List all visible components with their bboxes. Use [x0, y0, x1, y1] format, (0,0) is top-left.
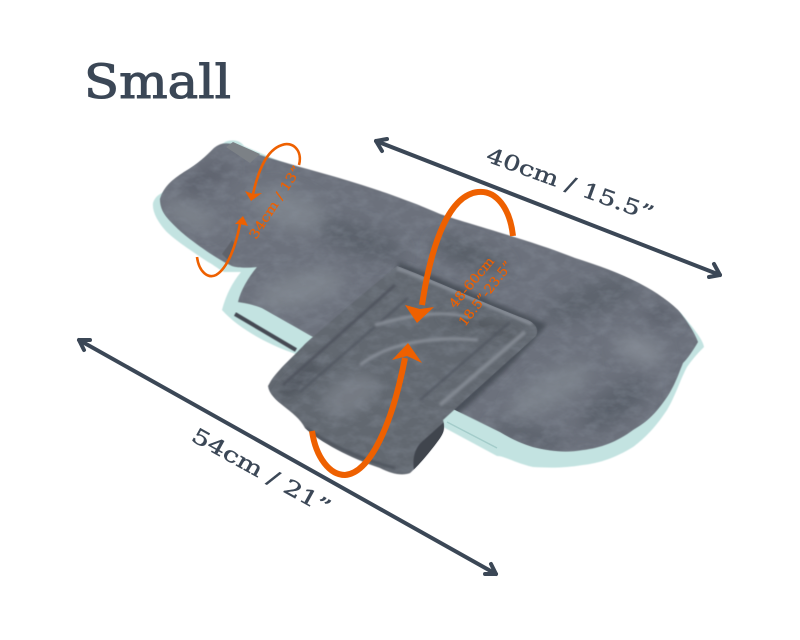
label: top dimension: 40cm / 15.5” [483, 143, 657, 226]
lower left trim shadow [235, 314, 296, 350]
dog drying coat illustration [150, 135, 710, 480]
neck tab [222, 240, 236, 260]
infographic canvas [76, 62, 722, 576]
title: Small [84, 55, 231, 110]
lower left trim band [232, 307, 316, 344]
neck label tag [226, 142, 260, 163]
label: bottom dimension: 54cm / 21” [188, 423, 335, 520]
arrow: neck measurement [197, 144, 300, 276]
strap fold lines [283, 285, 525, 468]
arrow: top dimension [376, 139, 720, 277]
fur texture [162, 156, 694, 450]
coat trim [153, 140, 704, 468]
label: chest measurement: 48-60cm [447, 254, 498, 312]
arrow: chest measurement [312, 192, 513, 475]
label: neck measurement: 34cm / 13” [247, 164, 305, 242]
belly strap [260, 260, 545, 480]
strap cast shadow [397, 266, 540, 424]
arrow: bottom dimension [79, 340, 496, 574]
label: chest measurement: 18.5”-23.5” [456, 259, 516, 329]
coat body [150, 135, 710, 465]
strap texture [274, 268, 537, 472]
fur shading [160, 155, 679, 453]
hem fold line [447, 422, 497, 448]
